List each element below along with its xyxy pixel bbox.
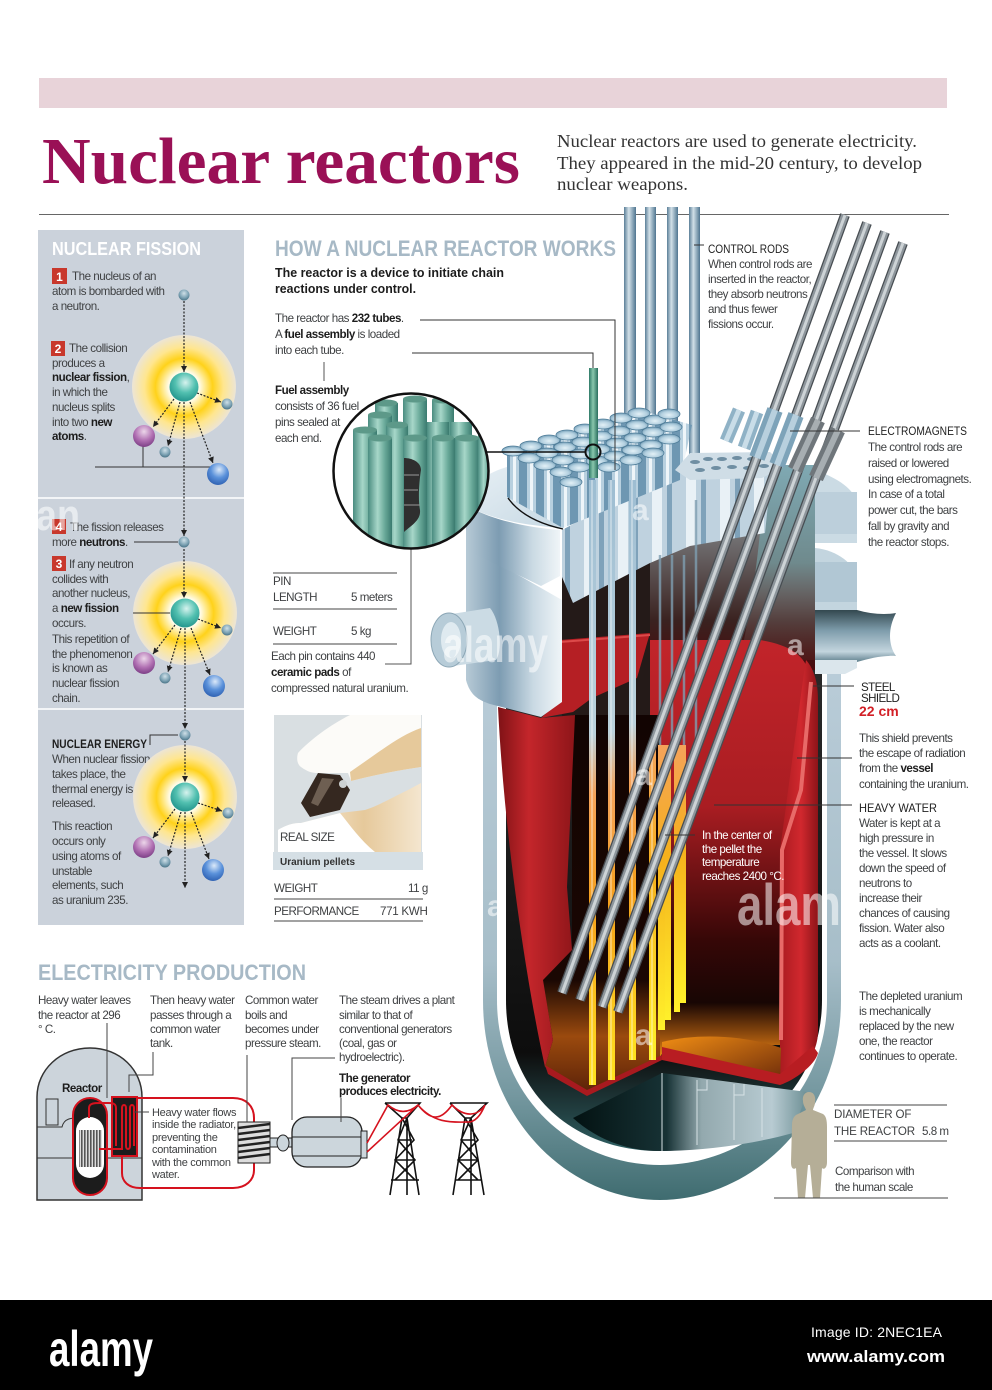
label: heavy water: chances of causing [859, 907, 950, 920]
heading: how a nuclear reactor works: HOW A NUCLEAR REACTOR WORKS [275, 236, 616, 261]
stock watermarks: a [632, 494, 649, 527]
step 3 text: This repetition of [52, 633, 130, 646]
red ledge [541, 633, 650, 718]
step 1 text [52, 268, 165, 313]
text: shield: This shield prevents [859, 732, 953, 745]
heading: nuclear fission: NUCLEAR FISSION [52, 239, 201, 259]
nuclear energy text: occurs only [52, 835, 106, 848]
text: generator [339, 1072, 441, 1098]
turbine shaft [270, 1135, 292, 1151]
table: pin: PIN [273, 575, 291, 588]
nuclear energy text: This reaction [52, 820, 112, 833]
footer bar: Image ID: 2NEC1EA [811, 1324, 943, 1340]
text: shield: from the vessel [859, 762, 933, 775]
nuclear energy text: takes place, the [52, 768, 126, 781]
text: step heavy water leaves: Heavy water leaves [38, 994, 131, 1007]
text: ceramic pads [271, 650, 408, 695]
title: Nuclear reactors [42, 125, 520, 198]
label: control rods [708, 243, 812, 331]
outer vessel [483, 670, 841, 1200]
step 4 text: more neutrons. [52, 536, 128, 549]
step 2 text [51, 341, 130, 443]
text: step plant: conventional generators [339, 1023, 452, 1036]
step 2 text: nucleus splits [52, 401, 116, 414]
upper shell [466, 545, 562, 717]
step 3 text: a new fission [52, 602, 119, 615]
step 4 text: 4 [56, 520, 63, 534]
step 2 text: produces a [52, 357, 106, 370]
callout: pellet temperature [702, 829, 784, 883]
label: heavy water: high pressure in [859, 832, 934, 845]
step 3 text [52, 556, 133, 705]
power lines [367, 1105, 485, 1152]
right flanges [815, 470, 896, 674]
step 1 text: The nucleus of an [72, 270, 156, 283]
text: shield [859, 732, 969, 791]
right hole plate [675, 452, 785, 480]
steel zone behind rods [740, 465, 815, 660]
text: tubes: The reactor has 232 tubes. [275, 312, 404, 325]
text: tubes: into each tube. [275, 344, 344, 357]
stock watermarks [36, 491, 841, 1052]
label: steel shield: SHIELD [861, 692, 900, 705]
fuel tube bundle [507, 410, 692, 528]
text: comparison [835, 1165, 914, 1194]
text: step plant [339, 994, 456, 1064]
text: step steam: pressure steam. [245, 1037, 321, 1050]
photo: uranium pellets [273, 715, 423, 870]
magnifier: fuel assembly [332, 392, 490, 550]
text: radiator: with the common [151, 1157, 231, 1169]
table: pellet data [274, 882, 428, 921]
label: electromagnets: The control rods are [868, 441, 962, 454]
text: radiator: water. [151, 1169, 180, 1181]
subheading [275, 265, 504, 296]
stock watermarks: alamy [443, 617, 548, 673]
head disc [466, 465, 563, 586]
text: step heavy water leaves [38, 994, 131, 1036]
intro text: Nuclear reactors are used to generate electricity. [557, 131, 917, 151]
label: heavy water [859, 802, 950, 950]
step 3 text: occurs. [52, 617, 86, 630]
subheading: reactions under control. [275, 281, 416, 296]
intro text: nuclear weapons. [557, 174, 688, 194]
label: control rods: they absorb neutrons [708, 288, 808, 301]
text: step heavy water leaves: ° C. [38, 1023, 56, 1036]
step 1 text: atom is bombarded with [52, 285, 165, 298]
text: step steam: becomes under [245, 1023, 319, 1036]
step 3 text: nuclear fission [52, 677, 119, 690]
panel: nuclear fission [38, 230, 244, 925]
step 3 text: 3 [56, 557, 63, 571]
label: electromagnets: power cut, the bars [868, 504, 958, 517]
label: steel shield: 22 cm [859, 703, 899, 719]
text: radiator: inside the radiator, [152, 1119, 236, 1131]
text: fuel assembly: each end. [275, 432, 322, 445]
step 3 text: the phenomenon [52, 648, 132, 661]
text: comparison: Comparison with [835, 1165, 914, 1178]
text: fuel assembly: Fuel assembly [275, 384, 350, 397]
step 4 text: The fission releases [70, 521, 164, 534]
text: radiator: contamination [152, 1144, 217, 1156]
step 3 text: collides with [52, 573, 108, 586]
step 3 text: If any neutron [69, 558, 133, 571]
text: step steam: Common water [245, 994, 318, 1007]
callout: pellet temperature: temperature [702, 856, 759, 869]
text: comparison: the human scale [835, 1181, 913, 1194]
table: pellet data: WEIGHT [274, 882, 318, 895]
left wall [498, 707, 575, 1067]
pylon 1 [385, 1103, 420, 1195]
table: diameter [834, 1105, 949, 1141]
nuclear energy text: When nuclear fission [52, 753, 150, 766]
text: step heavy water leaves: the reactor at 296 [38, 1009, 120, 1022]
photo: uranium pellets: Uranium pellets [280, 857, 355, 868]
step 4 text [52, 519, 164, 549]
nuclear energy text: elements, such [52, 879, 123, 892]
text: depleted uranium: The depleted uranium [859, 990, 962, 1003]
footer bar: alamy [49, 1321, 153, 1377]
table: pin [273, 573, 397, 644]
text: radiator: preventing the [152, 1132, 218, 1144]
intro text: They appeared in the mid-20 century, to develop [557, 153, 922, 173]
atom diagram 2 [133, 536, 237, 729]
front floor rim [545, 1055, 662, 1096]
text: step plant: (coal, gas or [339, 1037, 397, 1050]
dark zone under head [562, 540, 650, 720]
text: ceramic pads: compressed natural uranium. [271, 682, 408, 695]
step 3 text: is known as [52, 662, 108, 675]
pylon 2 [450, 1103, 487, 1195]
text: depleted uranium: replaced by the new [859, 1020, 955, 1033]
label: heavy water: neutrons to [859, 877, 912, 890]
text: depleted uranium: one, the reactor [859, 1035, 933, 1048]
step 3 text: another nucleus, [52, 587, 130, 600]
text: generator: The generator [339, 1072, 411, 1085]
step 1 text: a neutron. [52, 300, 100, 313]
left nozzle [431, 608, 500, 667]
callout: pellet temperature: the pellet the [702, 843, 762, 856]
header band [39, 78, 947, 108]
electromagnets [726, 410, 757, 448]
label: control rods: CONTROL RODS [708, 243, 789, 256]
icon: human scale [791, 1092, 827, 1198]
text: shield: containing the uranium. [859, 778, 969, 791]
white gap [497, 670, 827, 1165]
step 2 text: in which the [52, 386, 107, 399]
text: step common tank: Then heavy water [150, 994, 235, 1007]
text: step plant: similar to that of [339, 1009, 413, 1022]
fuel tube heads [502, 408, 682, 487]
label: electromagnets: raised or lowered [868, 457, 949, 470]
text: fuel assembly: pins sealed at [275, 416, 341, 429]
atom diagram 1 [95, 290, 236, 536]
callout lines [107, 1023, 341, 1122]
step 2 text: atoms. [52, 430, 87, 443]
label: heavy water: HEAVY WATER [859, 802, 937, 815]
step 2 text: The collision [69, 342, 127, 355]
step 3 text: chain. [52, 692, 80, 705]
label: heavy water: Water is kept at a [859, 817, 941, 830]
stock watermarks: an [36, 491, 80, 540]
label: control rods: fissions occur. [708, 318, 774, 331]
left interior [543, 715, 660, 1093]
floor right [662, 1036, 781, 1082]
label: heavy water: fission. Water also [859, 922, 944, 935]
table: pin: LENGTH [273, 591, 317, 604]
heat exchanger tank [112, 1097, 137, 1156]
step 2 text: 2 [55, 342, 62, 356]
text: depleted uranium [859, 990, 962, 1063]
reactor building [37, 1048, 142, 1200]
step 2 text: into two new [52, 416, 113, 429]
nuclear energy text [52, 738, 150, 907]
stock watermarks: a [635, 1019, 652, 1052]
footer bar [0, 1300, 992, 1390]
magnifier ring marker [586, 444, 600, 460]
stock watermarks: a [487, 890, 504, 923]
subheading: The reactor is a device to initiate chain [275, 265, 504, 280]
table: diameter: 5.8 m [922, 1125, 949, 1138]
nuclear energy text: unstable [52, 865, 92, 878]
table: pellet data: 11 g [408, 882, 428, 895]
text: depleted uranium: continues to operate. [859, 1050, 957, 1063]
text: tubes: A fuel assembly is loaded [275, 328, 400, 341]
heading: electricity production: ELECTRICITY PRODUCTION [38, 960, 306, 985]
photo: uranium pellets: REAL SIZE [280, 831, 335, 844]
text: fuel assembly [275, 384, 359, 445]
text: step common tank [150, 994, 235, 1050]
text: step steam: boils and [245, 1009, 287, 1022]
text: ceramic pads: Each pin contains 440 [271, 650, 375, 663]
red loops [89, 1098, 254, 1188]
table: pellet data: PERFORMANCE [274, 905, 359, 918]
nuclear energy text: thermal energy is [52, 783, 133, 796]
reactor capsule [73, 1098, 107, 1195]
reactor cutaway illustration [431, 207, 903, 1200]
diagonal control rods [562, 215, 903, 1012]
rear wall red [650, 640, 810, 1057]
table: pin: WEIGHT [273, 625, 317, 638]
nuclear energy text: released. [52, 797, 96, 810]
text: step plant: The steam drives a plant [339, 994, 456, 1007]
text: tubes [275, 312, 404, 357]
stock watermarks: alam [737, 873, 841, 938]
label: heavy water: increase their [859, 892, 922, 905]
callout: pellet temperature: reaches 2400 °C. [702, 870, 784, 883]
fuel assembly green rod [589, 368, 598, 478]
text: radiator [151, 1107, 237, 1181]
text: radiator: Heavy water flows [152, 1107, 237, 1119]
generator [292, 1117, 367, 1167]
text: step common tank: common water [150, 1023, 221, 1036]
label: reactor: Reactor [62, 1082, 103, 1095]
diagram: power plant [37, 1023, 487, 1200]
label: control rods: When control rods are [708, 258, 812, 271]
atom diagram 3 [133, 730, 237, 888]
nuclear energy text: using atoms of [52, 850, 122, 863]
text: step common tank: tank. [150, 1037, 173, 1050]
table: pin: 5 kg [351, 625, 371, 638]
right wall [780, 660, 818, 1082]
callout: pellet temperature: In the center of [702, 829, 773, 842]
label: electromagnets: fall by gravity and [868, 520, 949, 533]
condenser [238, 1122, 270, 1163]
label: electromagnets: the reactor stops. [868, 536, 949, 549]
intro text [557, 131, 922, 194]
table: diameter: THE REACTOR [834, 1125, 915, 1138]
label: heavy water: the vessel. It slows [859, 847, 947, 860]
text: ceramic pads: ceramic pads of [271, 666, 352, 679]
label: control rods: inserted in the reactor, [708, 273, 811, 286]
table: pin: 5 meters [351, 591, 393, 604]
step 1 text: 1 [56, 270, 63, 284]
text: depleted uranium: is mechanically [859, 1005, 931, 1018]
control rods upper vertical [624, 207, 700, 469]
text: fuel assembly: consists of 36 fuel [275, 400, 359, 413]
label: electromagnets: In case of a total [868, 488, 944, 501]
label: heavy water: down the speed of [859, 862, 947, 875]
label: electromagnets: ELECTROMAGNETS [868, 425, 967, 438]
head ring front [562, 455, 772, 603]
label: electromagnets: using electromagnets. [868, 473, 972, 486]
fuel rods [589, 480, 696, 1085]
label: control rods: and thus fewer [708, 303, 778, 316]
text: step common tank: passes through a [150, 1009, 232, 1022]
text: shield: the escape of radiation [859, 747, 965, 760]
stock watermarks: a [635, 759, 652, 792]
table: diameter: DIAMETER OF [834, 1108, 911, 1121]
label: heavy water: acts as a coolant. [859, 937, 941, 950]
inner cavity [506, 660, 822, 1151]
label: electromagnets [868, 425, 972, 549]
leader lines [412, 245, 860, 835]
label: steel shield [859, 681, 900, 719]
label: steel shield: STEEL [861, 681, 896, 694]
nuclear energy text: as uranium 235. [52, 894, 128, 907]
rear wall dark zone [650, 530, 815, 670]
nuclear energy text: NUCLEAR ENERGY [52, 738, 147, 751]
bottom head [573, 1073, 807, 1151]
footer bar: www.alamy.com [806, 1347, 945, 1366]
stock watermarks: a [787, 629, 804, 662]
text: step plant: hydroelectric). [339, 1051, 405, 1064]
text: step steam [245, 994, 321, 1050]
step 2 text: nuclear fission, [52, 371, 130, 384]
table: pellet data: 771 KWH [380, 905, 428, 918]
text: generator: produces electricity. [339, 1085, 441, 1098]
